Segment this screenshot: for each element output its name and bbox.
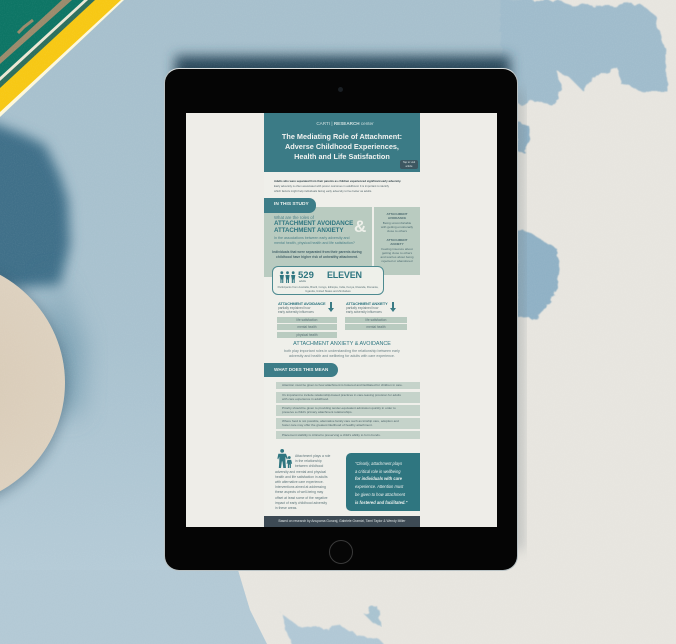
bar: mental health: [277, 324, 337, 330]
tablet body: [164, 68, 518, 571]
section tab: in this study: [264, 198, 316, 213]
finding: childhood have higher risk of unhealthy attachment.: [276, 255, 358, 259]
bar: mental health: mental health: [366, 325, 386, 329]
countries list: [278, 286, 378, 292]
definition: avoidance: close to others: [387, 229, 407, 233]
heading: anxiety and avoidance: ATTACHMENT ANXIETY & AVOIDANCE: [293, 341, 391, 347]
definition: avoidance: with getting emotionally: [381, 225, 413, 229]
countries number: ELEVEN: [327, 270, 362, 280]
tablet shadow: [175, 56, 510, 86]
stats box: [272, 266, 384, 295]
attachment avoidance heading: ATTACHMENT AVOIDANCE: [274, 220, 353, 227]
book stripes top-left: [0, 0, 124, 117]
quote callout: for individuals with care: [355, 476, 402, 481]
panel: definitions right: [374, 207, 420, 275]
heading: ATTACHMENT AVOIDANCE: [278, 301, 325, 306]
definition: avoidance: ATTACHMENT: [386, 212, 408, 216]
column: attachment anxiety: [345, 301, 407, 330]
description: [278, 306, 314, 314]
countries list: Uganda, United States and Zimbabwe: [305, 290, 351, 292]
attachment avoidance heading: ATTACHMENT ANXIETY: [274, 227, 343, 234]
description: early adversity influences: [346, 310, 382, 314]
bar: life satisfaction: [345, 317, 407, 323]
attachment avoidance heading: [274, 220, 353, 234]
infographic page: [264, 113, 420, 527]
title: The Mediating Role of Attachment:: [282, 132, 402, 141]
intro text: which factors might help individuals facing early adversity to live better as adults.: [274, 190, 372, 193]
title: Health and Life Satisfaction: [294, 152, 390, 161]
attachment paragraph: with alternative care experience.: [275, 480, 324, 484]
bar: mental health: mental health: [297, 325, 317, 329]
heading: ATTACHMENT ANXIETY: [346, 301, 388, 306]
attachment paragraph: health and life satisfaction in adults: [275, 475, 328, 479]
definition: anxiety: ANXIETY: [390, 242, 404, 246]
ampersand: &: [354, 217, 366, 236]
description: partially explained how: [278, 306, 310, 310]
attachment paragraph: in these areas.: [275, 506, 297, 510]
definition: avoidance: AVOIDANCE: [388, 216, 406, 220]
attachment paragraph: adversity and mental and physical: [275, 470, 326, 474]
recommendation 2: [276, 392, 420, 403]
footer: Based on research by Anupama Gururaj, Gabriele Gramizi, Tarni Taylor & Wendy Miller: [278, 519, 406, 523]
brand line: CARTI | RESEARCH center: [316, 121, 374, 126]
title: Adverse Childhood Experiences,: [285, 142, 399, 151]
footer: [264, 516, 420, 527]
attachment paragraph: impact of early childhood adversity: [275, 501, 327, 505]
attachment paragraph: Attachment plays a role: [295, 454, 330, 458]
bar: life satisfaction: [277, 317, 337, 323]
blue wash: [0, 0, 530, 80]
bar: physical health: physical health: [296, 333, 318, 337]
participants number: 529: [298, 270, 314, 281]
definition: anxiety: rejected or abandoned: [382, 259, 412, 263]
quote callout: experience. Attention must: [355, 484, 403, 489]
attachment paragraph: between childhood: [295, 464, 323, 468]
bar: physical health: [277, 332, 337, 338]
definition: anxiety: and worries about being: [380, 255, 414, 259]
recommendation 3: [276, 405, 420, 416]
attachment paragraph: [275, 454, 330, 510]
recommendation 3: preserve a child's primary attachment relationships.: [282, 410, 352, 414]
question continued: [274, 236, 355, 245]
blue stain top right: [500, 0, 668, 106]
summary text: adversity and health and wellbeing for adults with care experience.: [289, 354, 395, 358]
attachment paragraph: offset at least some of the negative: [275, 496, 328, 500]
recommendation 4: foster care may offer the greatest likelihood of healthy attachment.: [282, 423, 373, 427]
section tab: what does this mean: WHAT DOES THIS MEAN: [274, 367, 328, 372]
recommendation 4: [276, 418, 420, 429]
question continued: In the associations between early adversity and: [274, 236, 350, 240]
attachment paragraph: Interventions aimed at addressing: [275, 485, 326, 489]
quote callout: "Clearly, attachment plays: [355, 461, 402, 466]
quote callout: is fostered and facilitated.": [355, 500, 407, 505]
panel: in this study left: [264, 207, 372, 277]
summary text: both play important roles in understanding the relationship between early: [284, 349, 400, 353]
summary text: [284, 349, 400, 358]
plate: [0, 259, 67, 510]
people icon: [280, 271, 296, 283]
quote callout: a critical role in wellbeing: [355, 469, 401, 474]
question: What are the roles of: [274, 215, 314, 220]
recommendation 1: [276, 382, 420, 389]
question continued: mental health, physical health and life satisfaction?: [274, 241, 355, 245]
finding: Individuals that were separated from their parents during: [272, 250, 362, 254]
bar: mental health: [345, 324, 407, 330]
quote callout: be given to how attachment: [355, 492, 405, 497]
home button: [329, 540, 353, 564]
recommendation 2: with care experience in adulthood.: [282, 397, 329, 401]
definition: avoidance: Being uncomfortable: [383, 221, 411, 225]
recommendation bars: [276, 382, 420, 439]
icon: down arrow: [328, 302, 334, 312]
finding: [272, 250, 362, 259]
attachment paragraph: in the relationship: [295, 459, 322, 463]
participants caption: adults: [299, 280, 306, 283]
intro text: Adults who were separated from their parents as children experienced significant early adversity.: [274, 180, 401, 183]
definition: anxiety: [380, 238, 414, 263]
dark stain left: [0, 118, 70, 290]
tap label: article: [406, 164, 412, 168]
section tab: in this study: IN THIS STUDY: [274, 202, 309, 207]
recommendation 4: Where food is not possible, alternative family care such as kinship care, adoption and: [282, 419, 399, 423]
recommendation 2: It's important to include relationship-based practices in care-leaving provision for adults: [282, 393, 401, 397]
recommendation 5: Placement stability is critical to preserving a child's ability to form bonds.: [282, 432, 381, 436]
intro text: Early adversity is often associated with poorer outcomes in adulthood. It is important to identify: [274, 185, 389, 188]
bar: life satisfaction: life satisfaction: [366, 318, 386, 322]
description: early adversity influences: [278, 310, 314, 314]
header banner: [264, 113, 420, 172]
recommendation 3: Priority should be given to providing tender-equivalent admission quickly in order to: [282, 406, 396, 410]
screen: [186, 113, 497, 527]
bar: life satisfaction: life satisfaction: [297, 318, 317, 322]
column: attachment avoidance: [277, 301, 337, 338]
quote callout: [346, 453, 426, 511]
tap label: Tap to visit: [403, 161, 415, 164]
blue stain right edge: [516, 122, 530, 152]
section tab: what does this mean: [264, 363, 338, 377]
icon: down arrow: [390, 302, 396, 312]
definition: avoidance: [380, 212, 413, 233]
icon: parent and child: [277, 449, 292, 468]
intro text: [274, 180, 401, 193]
title: [282, 132, 402, 161]
camera: [338, 87, 343, 92]
definition: anxiety: getting close to others: [382, 251, 412, 255]
definition: anxiety: Feeling insecure about: [381, 247, 413, 251]
blue stain bottom: [0, 570, 267, 644]
description: partially explained how: [346, 306, 378, 310]
countries list: Participants from Australia, Brazil, Congo, Ethiopia, India, Kenya, Rwanda, Romania,: [278, 286, 378, 289]
description: [346, 306, 382, 314]
recommendation 5: [276, 431, 420, 439]
tap label: [400, 160, 418, 169]
recommendation 1: Attention must be given to how attachment is fostered and facilitated for children in care.: [282, 383, 403, 387]
attachment paragraph: these aspects of well-being may: [275, 490, 323, 494]
definition: anxiety: ATTACHMENT: [386, 238, 408, 242]
